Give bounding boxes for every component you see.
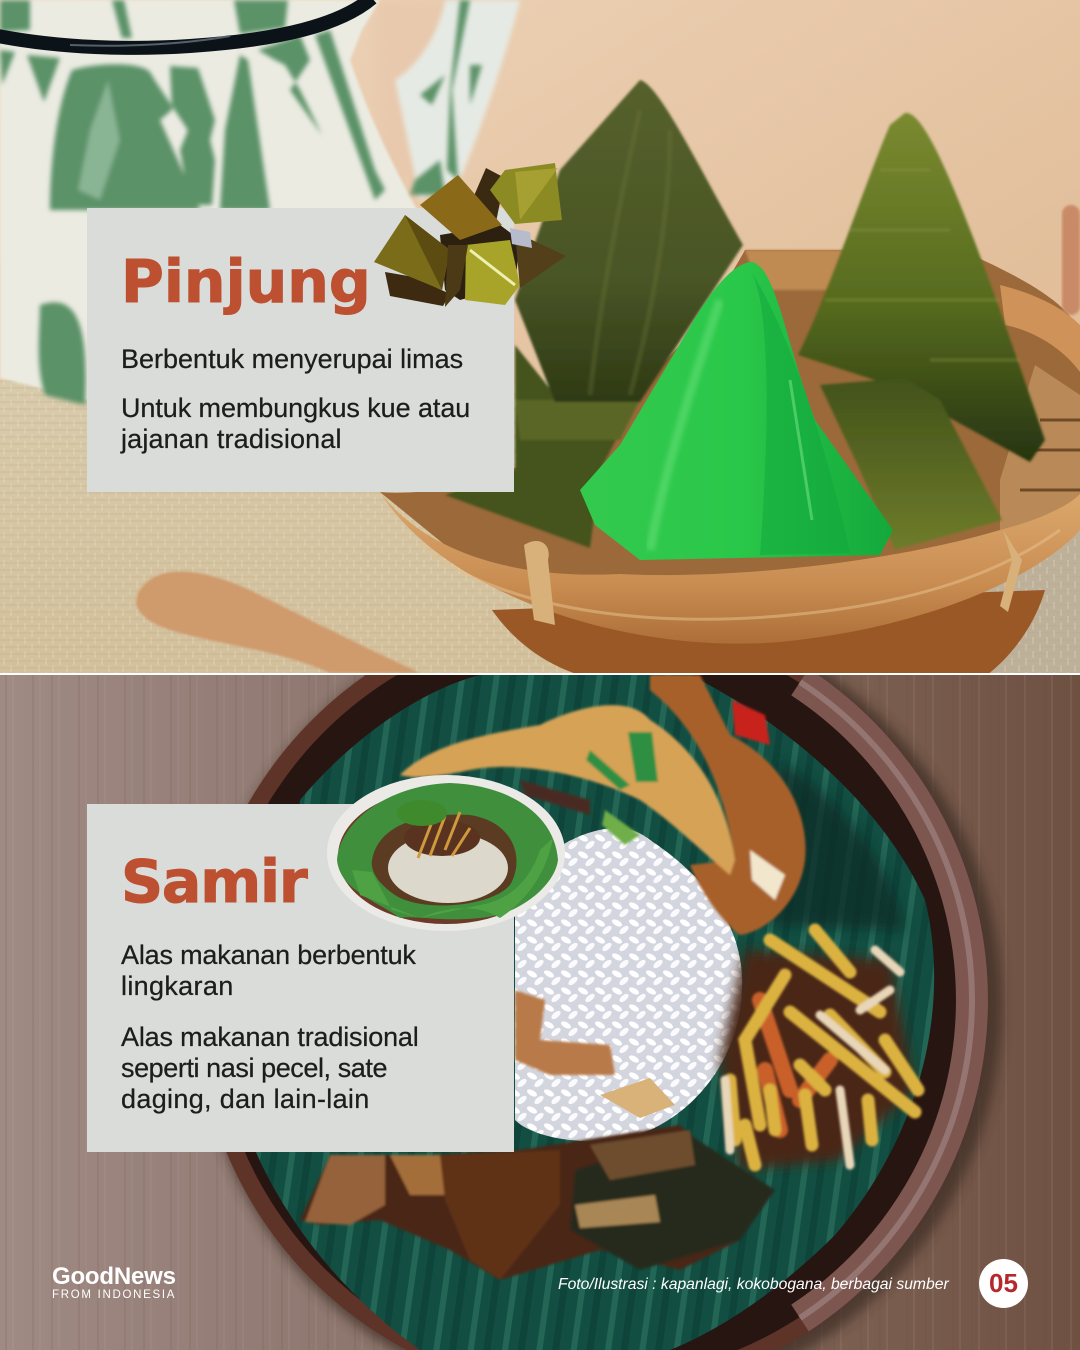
photo: pinjung on basket — [0, 0, 1080, 680]
panel: Pinjung — [87, 208, 514, 492]
text: shape description: lingkaran — [121, 971, 234, 1001]
fried tempura — [400, 675, 806, 935]
page number badge — [979, 1259, 1028, 1308]
text: usage description: Untuk membungkus kue atau — [121, 393, 470, 423]
logo: GoodNews from Indonesia: GoodNews — [52, 1263, 176, 1290]
enamel teapot — [0, 0, 520, 405]
plate — [226, 675, 808, 1350]
text: shape description: Berbentuk menyerupai limas — [121, 344, 463, 374]
rice — [515, 828, 742, 1141]
spoon — [136, 571, 420, 673]
text: usage description: seperti nasi pecel, sate — [121, 1053, 387, 1083]
logo: GoodNews from Indonesia: FROM INDONESIA — [52, 1289, 176, 1301]
shredded vegetables — [720, 930, 918, 1170]
icon: samir dish — [327, 775, 565, 931]
text: shape description — [120, 940, 416, 1001]
text: usage description: jajanan tradisional — [121, 424, 342, 454]
heading: Samir: Samir — [121, 848, 306, 916]
text: shape description: Alas makanan berbentuk — [121, 940, 416, 970]
green kue — [580, 262, 893, 560]
photo credit: Foto/Ilustrasi : kapanlagi, kokobogana, berbagai sumber — [558, 1276, 949, 1293]
banana leaf — [255, 675, 934, 1350]
photo divider — [0, 673, 1080, 675]
text: usage description: daging, dan lain-lain — [121, 1084, 370, 1114]
heading: Pinjung: Pinjung — [121, 248, 371, 316]
text: usage description: Alas makanan tradisional — [121, 1022, 419, 1052]
basket — [380, 250, 1080, 680]
banana leaf pyramids — [445, 80, 1045, 550]
page number badge: 05 — [989, 1268, 1018, 1298]
panel: Samir — [87, 804, 514, 1152]
text: usage description — [120, 1022, 419, 1114]
meat and sambal — [300, 1125, 775, 1280]
icon: pinjung cluster — [374, 163, 566, 307]
photo: samir plate — [0, 603, 1080, 1350]
text: usage description — [120, 393, 470, 454]
